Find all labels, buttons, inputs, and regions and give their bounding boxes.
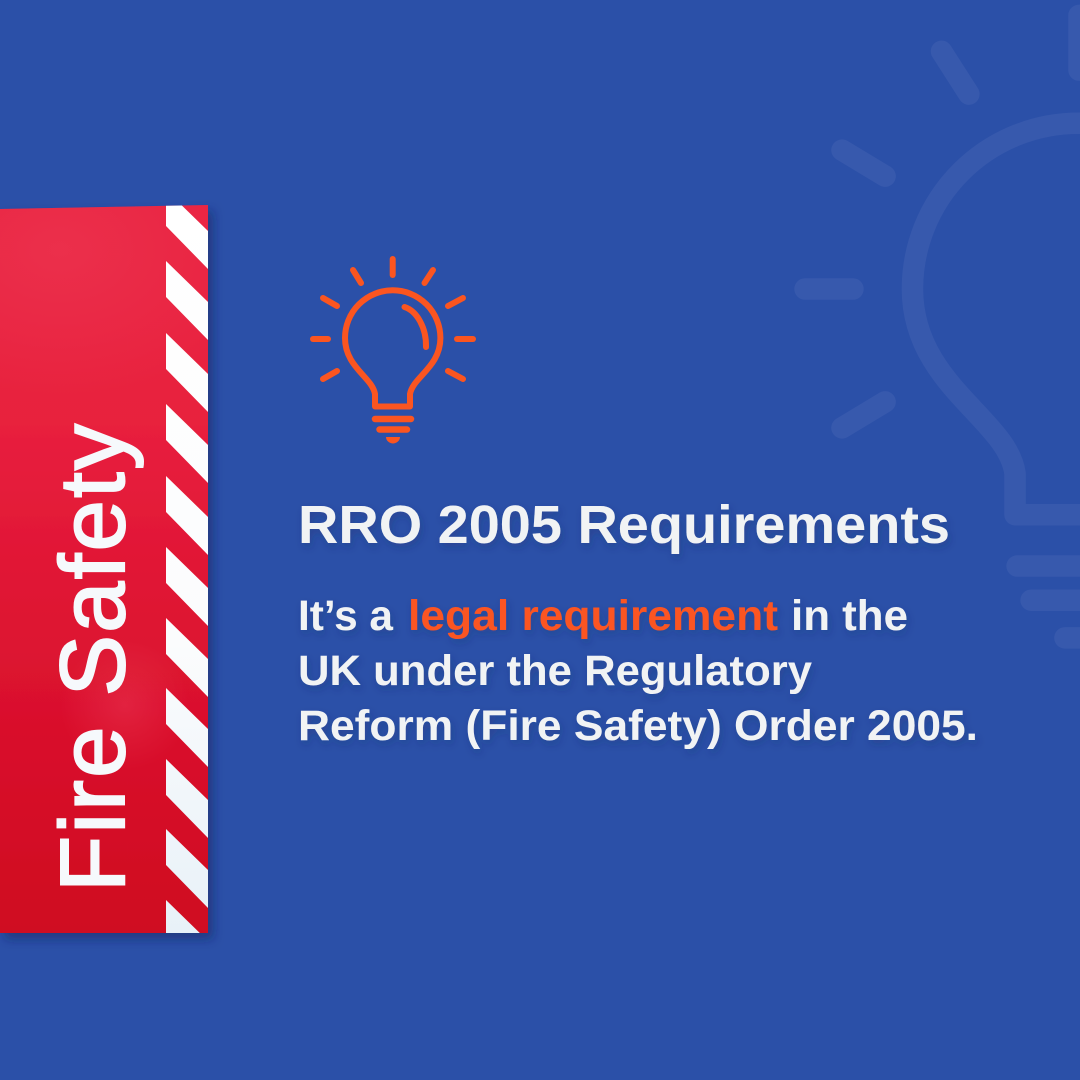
panel: red Fire Safety folder — [0, 205, 218, 944]
heading: RRO 2005 Requirements — [298, 495, 950, 555]
icon: large faint light bulb watermark — [805, 15, 1080, 638]
rotated label: Fire Safety: Fire Safety — [42, 424, 144, 892]
icon: orange light bulb — [313, 259, 473, 444]
highlighted phrase: legal requirement — [408, 592, 778, 640]
line 1 — [298, 592, 908, 640]
line 3: Reform (Fire Safety) Order 2005. — [298, 702, 978, 750]
line 1: It’s a — [298, 592, 394, 640]
body text block — [298, 592, 978, 750]
hazard stripes — [166, 190, 208, 979]
line 1: in the — [791, 592, 908, 640]
line 2: UK under the Regulatory — [298, 647, 812, 695]
